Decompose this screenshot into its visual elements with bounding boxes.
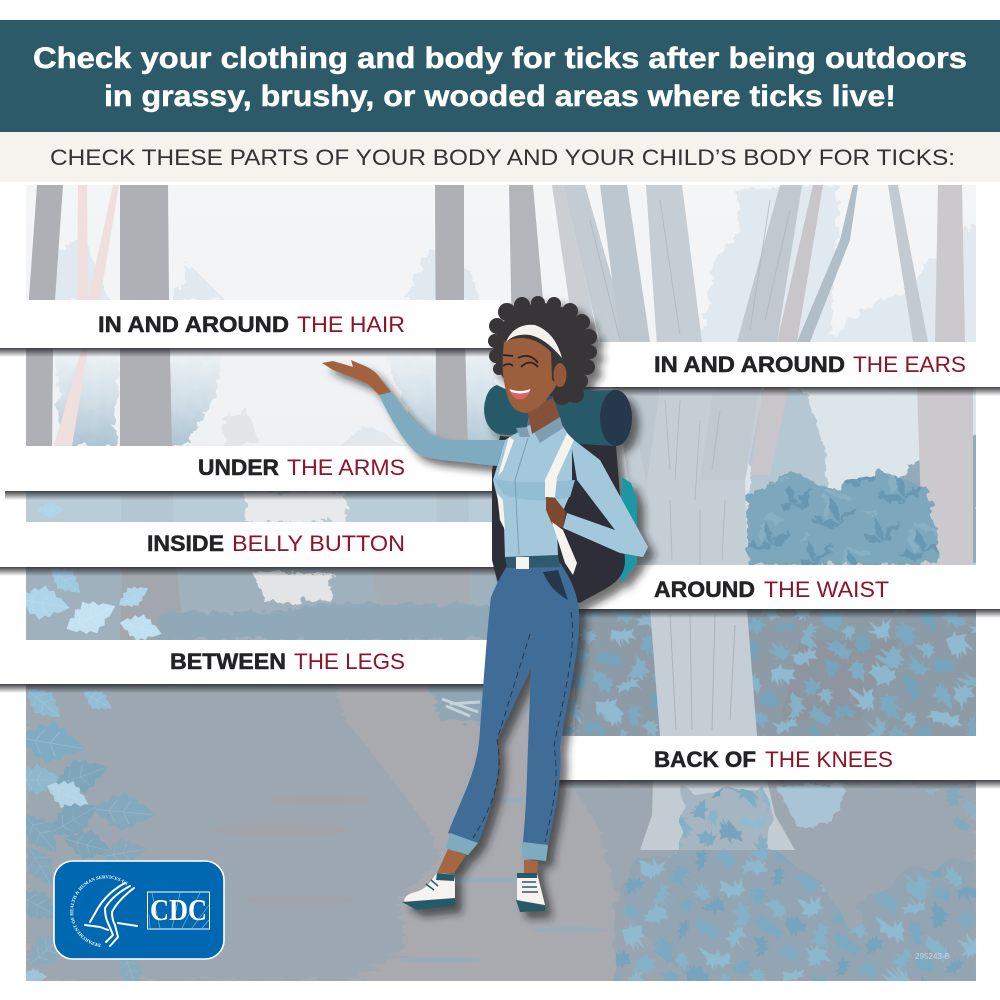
- band: inside belly button: [0, 522, 500, 576]
- document number: 295243-B: [915, 952, 950, 961]
- band: back of the knees: BACK OF: [654, 747, 756, 772]
- distant foliage: [40, 185, 980, 345]
- band: around the waist: THE WAIST: [764, 577, 889, 602]
- lower-right leaf cluster: [610, 790, 980, 990]
- hiker illustration: [322, 296, 648, 912]
- HHS eagle: [85, 883, 137, 946]
- bedroll: [484, 385, 632, 446]
- headline: [33, 42, 967, 113]
- right leaf thickets: [748, 470, 938, 565]
- band: around the waist: AROUND: [654, 577, 755, 602]
- logo badge: [53, 860, 225, 960]
- logo badge: CDC: [150, 892, 207, 927]
- shirt: [493, 417, 575, 558]
- band: back of the knees: THE KNEES: [765, 747, 893, 772]
- band: in and around the ears: THE EARS: [853, 352, 966, 377]
- raised hand: [322, 360, 391, 395]
- left boot: [402, 873, 455, 910]
- band: under the arms: [0, 446, 505, 500]
- band: between the legs: [0, 640, 490, 693]
- belt: [505, 555, 560, 569]
- forest background scene: [9, 185, 990, 992]
- header banner: [0, 20, 1000, 132]
- headband: [506, 325, 562, 358]
- lower-left big leaves: [26, 689, 155, 981]
- HHS ring text: [73, 878, 126, 944]
- forest floor band: [26, 567, 506, 642]
- band: in and around the hair: [0, 300, 500, 357]
- band: between the legs: THE LEGS: [294, 649, 405, 674]
- CDC box: [148, 892, 210, 929]
- band: under the arms: UNDER: [198, 455, 279, 480]
- trunk base over ground: [640, 780, 795, 850]
- band: between the legs: BETWEEN: [170, 649, 286, 674]
- ground: [26, 640, 586, 981]
- fern: [442, 699, 480, 716]
- band: around the waist: [575, 565, 1000, 618]
- band: in and around the hair: IN AND AROUND: [98, 312, 289, 337]
- band: inside belly button: BELLY BUTTON: [232, 531, 405, 556]
- right boot: [516, 873, 545, 912]
- shoulder arm with hand on strap: [546, 437, 648, 557]
- band: back of the knees: [555, 736, 1000, 789]
- mid band under arms: [26, 491, 506, 522]
- band: in and around the ears: IN AND AROUND: [654, 352, 845, 377]
- smile: [509, 389, 531, 400]
- eyes and brows: [503, 355, 538, 367]
- bark streaks: [590, 200, 790, 565]
- backpack straps: [497, 433, 577, 575]
- right trees: [509, 185, 973, 565]
- backpack: [492, 436, 637, 603]
- raised arm: [379, 392, 505, 466]
- hair: [488, 296, 597, 405]
- subheading band: CHECK THESE PARTS OF YOUR BODY AND YOUR CHILD’S BODY FOR TICKS:: [50, 145, 955, 170]
- legs and cuffs: [437, 833, 548, 873]
- band: in and around the hair: THE HAIR: [297, 312, 405, 337]
- left trees: [26, 185, 468, 446]
- band: in and around the ears: [580, 342, 1000, 396]
- neck: [527, 398, 560, 434]
- band: inside belly button: INSIDE: [147, 531, 224, 556]
- upper-left pale leaves: [26, 502, 162, 640]
- jeans: [448, 563, 579, 845]
- face: [503, 325, 566, 413]
- subheading band: [0, 132, 1000, 182]
- logo badge: DEPARTMENT OF HEALTH & HUMAN SERVICES·USA: [70, 875, 128, 947]
- headline: Check your clothing and body for ticks after being outdoors: [33, 42, 967, 75]
- band: under the arms: THE ARMS: [287, 455, 405, 480]
- headline: in grassy, brushy, or wooded areas where ticks live!: [104, 80, 896, 113]
